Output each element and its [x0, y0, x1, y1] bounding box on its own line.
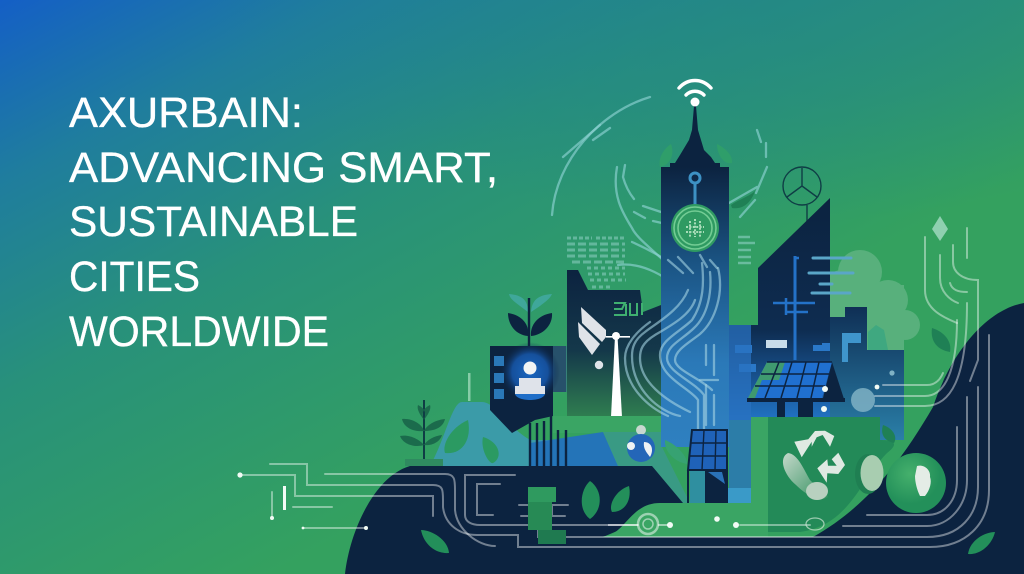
mound [430, 402, 690, 503]
central component [528, 487, 566, 544]
tower leaves [659, 144, 732, 167]
title [69, 89, 498, 356]
globe with person [627, 425, 655, 462]
gauge wheel icon [783, 167, 821, 222]
lower solar panel [688, 430, 751, 503]
icon block with person [490, 342, 567, 433]
tall building [729, 198, 830, 420]
stripes beside tower [738, 237, 755, 263]
pale drop icon [932, 216, 948, 241]
main tower [661, 106, 751, 490]
sensor circle [851, 388, 875, 412]
title: WORLDWIDE [69, 308, 329, 356]
building sign glyphs [614, 303, 642, 315]
mound leaves [444, 420, 499, 463]
building details [735, 256, 861, 372]
plant above block [508, 294, 552, 346]
right low building [830, 307, 904, 440]
skyline grid dashes [567, 238, 626, 287]
left seedling [400, 400, 445, 466]
ground leaves [421, 481, 995, 554]
tree blobs [822, 250, 920, 351]
circuit lines [240, 228, 989, 547]
wind turbine [606, 332, 630, 417]
circuit ring node [608, 514, 668, 534]
wifi icon [679, 80, 711, 106]
tower sensor pin [690, 173, 700, 205]
circuit mouse icon [806, 518, 824, 530]
teal leaf near panel [665, 440, 687, 464]
small teal tree [868, 325, 888, 350]
tower flowing lines [625, 255, 720, 443]
upper leaves [731, 191, 950, 443]
white wing icon [578, 307, 606, 369]
green base panel [603, 417, 768, 537]
upper solar panel [747, 362, 845, 417]
left building [567, 270, 661, 416]
sphere lock icon [886, 453, 946, 513]
pale post [468, 373, 470, 401]
recycling panel [768, 417, 894, 532]
recycling ovals [783, 453, 884, 500]
navy ground [345, 303, 1024, 574]
data arcs around tower [552, 97, 767, 300]
recycling symbol [794, 431, 845, 483]
title: CITIES [69, 253, 200, 301]
title: AXURBAIN: [69, 89, 303, 137]
green band [553, 416, 662, 433]
title: SUSTAINABLE [69, 198, 358, 246]
circuit end nodes [237, 370, 895, 530]
tower circular badge [671, 204, 719, 252]
pillars [530, 416, 566, 466]
title: ADVANCING SMART, [69, 144, 498, 192]
